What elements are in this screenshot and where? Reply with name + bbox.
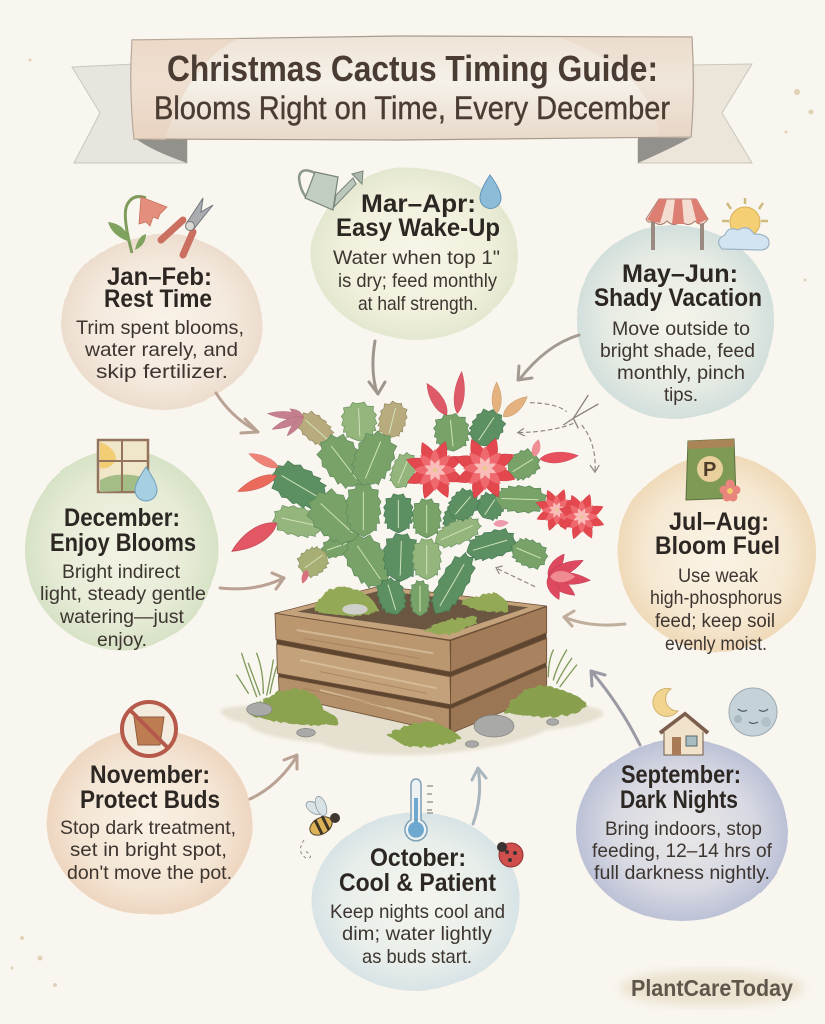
arrow: March to plant (369, 341, 385, 394)
heading: Rest Time (104, 285, 212, 313)
icon: awning (646, 199, 708, 250)
heading: September: (621, 761, 741, 789)
body text: monthly, pinch (617, 362, 745, 384)
icon: ladybug (497, 842, 523, 867)
body text: full darkness nightly. (594, 862, 770, 884)
panel: December (25, 440, 219, 651)
arrow: July to plant (564, 611, 625, 626)
body text: skip fertilizer. (96, 361, 228, 383)
icon: small flower (720, 480, 740, 502)
panel: May June (577, 198, 775, 419)
panel: March April (299, 168, 518, 340)
title banner (72, 36, 752, 163)
title line 1: Christmas Cactus Timing Guide: (167, 48, 658, 89)
body text (600, 318, 755, 406)
body text: Bring indoors, stop (605, 818, 762, 840)
body text: Trim spent blooms, (76, 317, 244, 339)
right ribbon tail (638, 64, 752, 163)
heading (80, 761, 220, 814)
icon: crescent moon (653, 688, 678, 716)
small scissors (563, 395, 598, 428)
heading: Easy Wake-Up (336, 214, 500, 242)
flower buds (228, 371, 579, 585)
heading: Bloom Fuel (655, 532, 780, 560)
heading (336, 190, 500, 242)
left ribbon tail (72, 64, 187, 163)
panel: July August (618, 439, 816, 655)
arrow: September to plant (591, 671, 640, 745)
body text: tips. (664, 384, 698, 406)
moss mounds (250, 685, 587, 747)
body text: as buds start. (362, 946, 472, 968)
ground wash (220, 706, 603, 755)
logo wash (620, 970, 804, 1006)
arrow: October to plant (472, 768, 486, 824)
heading: Cool & Patient (339, 869, 497, 897)
heading: Jul–Aug: (669, 508, 769, 536)
icon: fertilizer bag: P (703, 459, 716, 481)
heading: October: (370, 844, 466, 872)
drooping bloom (544, 551, 591, 602)
body text: feed; keep soil (655, 610, 775, 632)
icon: thermometer (405, 779, 433, 841)
body text (333, 247, 500, 315)
flowers (396, 428, 612, 602)
icon: no-moving pot (122, 702, 176, 756)
icon: bee (300, 795, 340, 858)
heading (655, 508, 780, 560)
panel: November (47, 702, 253, 915)
heading: May–Jun: (622, 260, 738, 288)
body text: light, steady gentle (40, 583, 206, 605)
banner body (131, 36, 693, 140)
arrow: May to plant (518, 335, 579, 380)
icon: moon face (729, 688, 777, 736)
body text: enjoy. (97, 629, 147, 651)
body text: Stop dark treatment, (60, 817, 236, 839)
title line 2: Blooms Right on Time, Every December (154, 90, 670, 126)
blob (25, 450, 219, 650)
body text (592, 818, 773, 884)
blob (577, 225, 775, 419)
heading: November: (90, 761, 210, 789)
icon: window (98, 440, 148, 492)
body text (76, 317, 244, 383)
arrow: December to plant (220, 573, 284, 589)
grass tufts (237, 650, 577, 697)
body text: Use weak (678, 565, 758, 587)
heading: Mar–Apr: (361, 190, 476, 218)
heading: Shady Vacation (594, 284, 762, 312)
panel: October (300, 779, 523, 991)
heading: Dark Nights (620, 786, 738, 814)
heading: Enjoy Blooms (50, 529, 196, 557)
icon: house (660, 714, 708, 755)
body text: is dry; feed monthly (338, 270, 497, 292)
body text: Move outside to (612, 318, 750, 340)
body text: don't move the pot. (67, 862, 232, 884)
central illustration: cactus in wooden crate (220, 371, 612, 755)
blob (312, 813, 520, 991)
blob (62, 234, 262, 410)
dashed pinch arrows (496, 403, 599, 587)
heading: Jan–Feb: (107, 263, 212, 291)
heading (339, 844, 497, 897)
ribbon folds (135, 138, 690, 163)
body text: dim; water lightly (342, 923, 492, 945)
body text: bright shade, feed (600, 340, 755, 362)
stem bases over soil (373, 548, 481, 620)
blob (576, 739, 788, 921)
body text (40, 561, 206, 651)
body text: Water when top 1" (333, 247, 500, 269)
body text: feeding, 12–14 hrs of (592, 840, 773, 862)
icon: pruners (161, 198, 213, 255)
arrow: November to plant (250, 755, 297, 799)
heading (594, 260, 762, 312)
icon: water drop (135, 467, 157, 501)
crate right face (451, 607, 547, 733)
body text: watering—just (59, 606, 185, 628)
panel: September (576, 688, 788, 921)
icon: drooping flower (108, 197, 167, 253)
heading: December: (64, 504, 180, 532)
icon: sun and cloud (719, 198, 769, 250)
icon: fertilizer bag (686, 439, 736, 500)
icon: watering can (299, 170, 363, 210)
wilted flower (267, 407, 306, 438)
arrow: January to plant (216, 393, 258, 433)
logo text: PlantCareToday (631, 975, 793, 1001)
heading (620, 761, 741, 814)
icon: water drop (480, 175, 501, 208)
blob (618, 455, 816, 651)
panel: January February (62, 197, 262, 410)
body text: Bright indirect (62, 561, 181, 583)
body text (330, 901, 505, 968)
crate rim and soil (275, 586, 547, 640)
blob (47, 729, 253, 915)
cactus stems (264, 399, 551, 596)
body text: high-phosphorus (650, 587, 782, 609)
blob (312, 168, 518, 340)
body text (60, 817, 236, 884)
body text: water rarely, and (84, 339, 238, 361)
body text: at half strength. (358, 293, 478, 315)
stones (247, 703, 559, 747)
heading (50, 504, 196, 557)
crate backing (275, 586, 547, 733)
body text: Keep nights cool and (330, 901, 505, 923)
body text: evenly moist. (665, 633, 767, 655)
body text (650, 565, 782, 655)
heading: Protect Buds (80, 786, 220, 814)
body text: set in bright spot, (70, 839, 227, 861)
heading (104, 263, 212, 313)
soil rock (342, 604, 368, 615)
crate left face (275, 613, 451, 733)
moss patches (315, 587, 509, 635)
